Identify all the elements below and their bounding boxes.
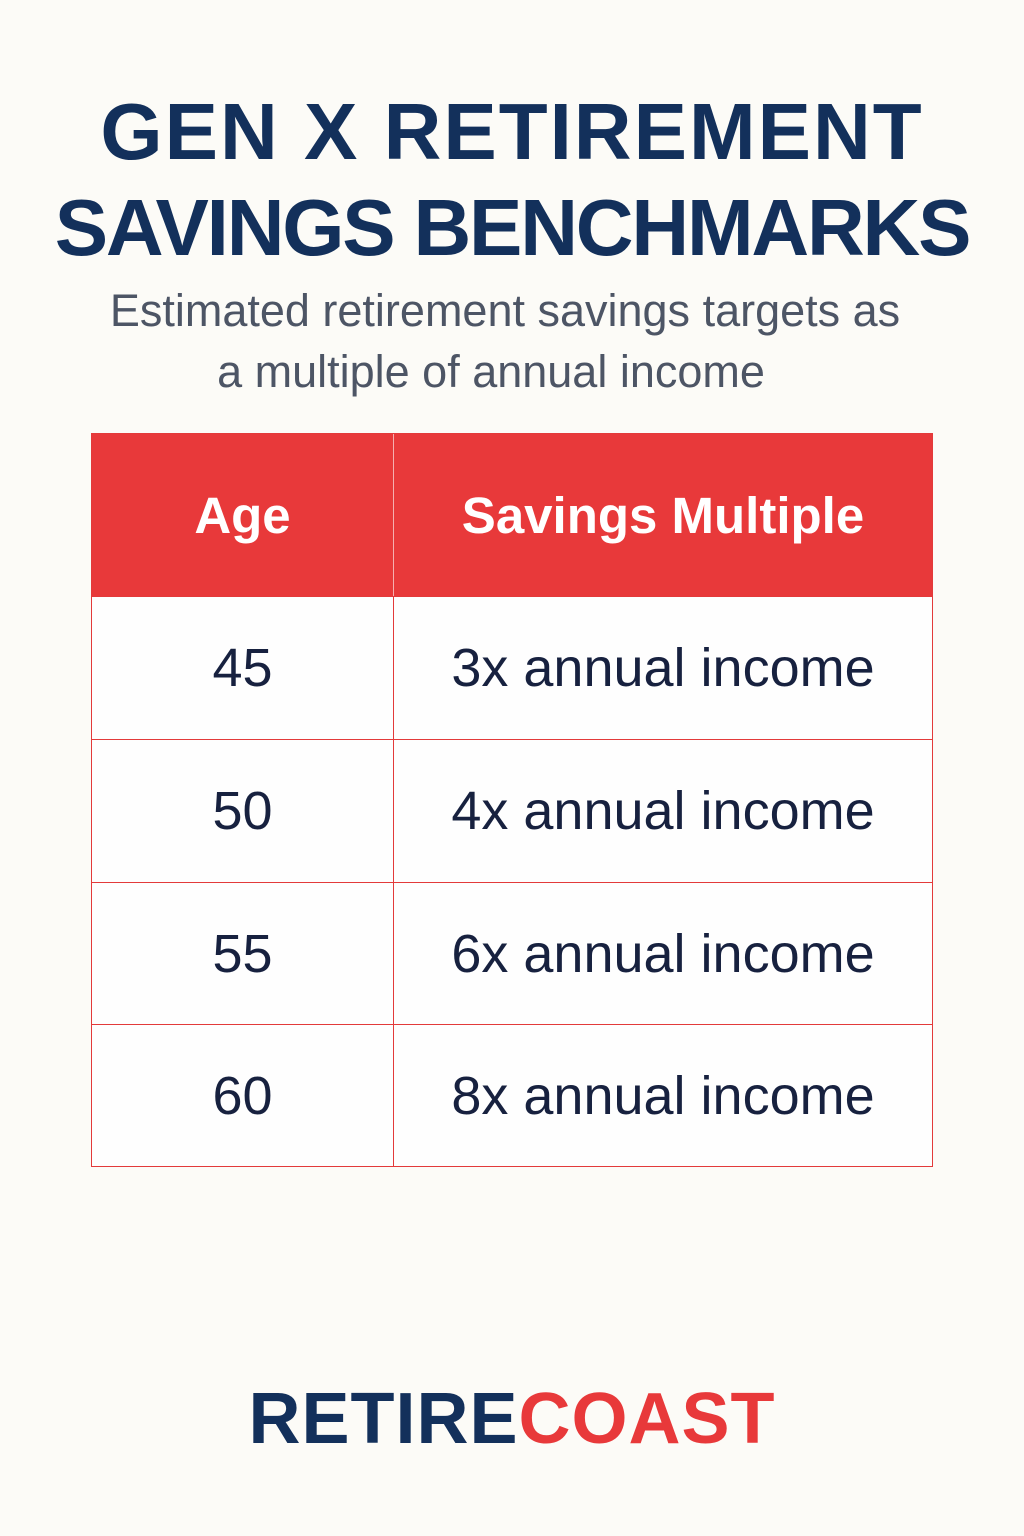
subtitle: Estimated retirement savings targets as [110, 285, 900, 336]
table header: Savings Multiple [462, 486, 864, 544]
row: age 55 [92, 882, 932, 1025]
row: age 50 [92, 739, 932, 882]
row: age 45: 3x annual income [451, 638, 875, 698]
row: age 55: 55 [212, 924, 273, 984]
title [55, 87, 969, 272]
row: age 50: 50 [212, 781, 273, 841]
row: age 60 [92, 1024, 932, 1166]
subtitle: a multiple of annual income [217, 346, 765, 397]
subtitle [110, 285, 900, 397]
row: age 50: 4x annual income [451, 781, 875, 841]
title: GEN X RETIREMENT [100, 87, 924, 176]
title: SAVINGS BENCHMARKS [55, 183, 969, 272]
table header [92, 434, 932, 596]
row: age 55: 6x annual income [451, 924, 875, 984]
logo: RETIRECOAST [248, 1379, 776, 1459]
table header: Age [194, 486, 291, 544]
row: age 60: 8x annual income [451, 1066, 875, 1126]
table: savings benchmarks [91, 433, 933, 1167]
row: age 60: 60 [212, 1066, 273, 1126]
row: age 45 [92, 596, 932, 739]
row: age 45: 45 [212, 638, 273, 698]
